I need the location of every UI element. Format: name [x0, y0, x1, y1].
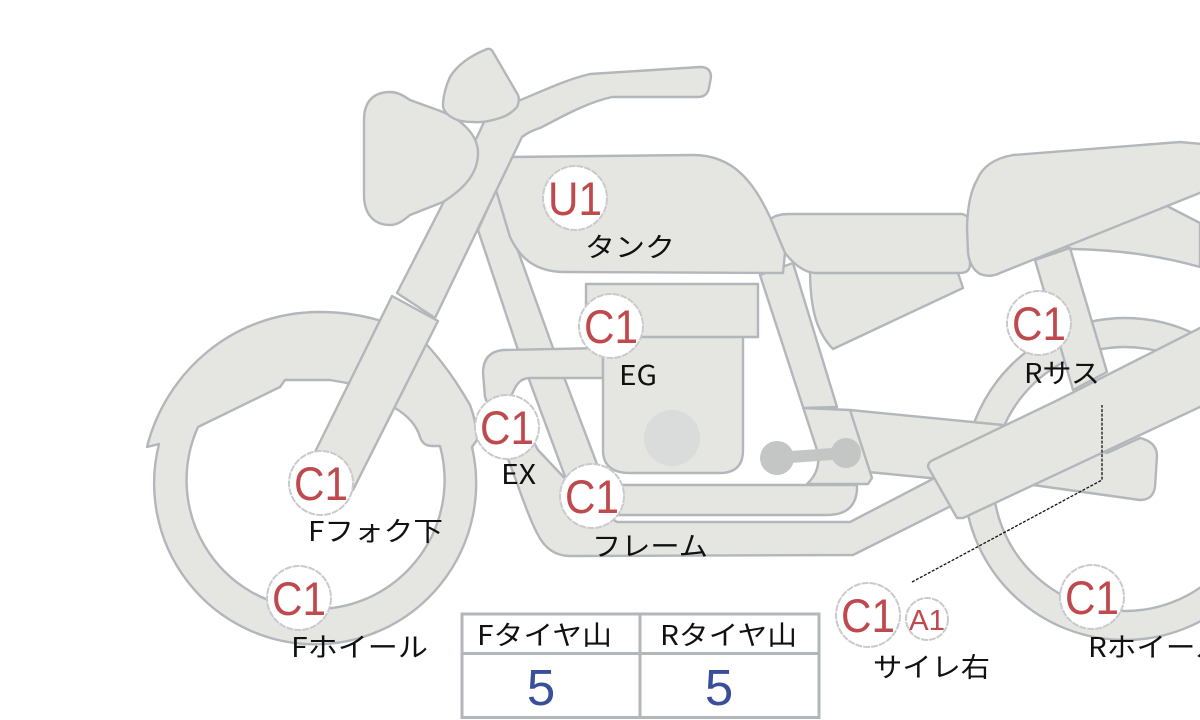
- tire tread table: 5: [527, 659, 555, 716]
- front fork lower: [315, 296, 438, 490]
- marker: front wheel: C1: [272, 572, 326, 625]
- marker: exhaust: [475, 395, 539, 492]
- marker: engine: C1: [584, 300, 638, 353]
- marker: rear suspension: Rサス: [1024, 352, 1100, 391]
- rear fender: [1040, 206, 1200, 267]
- engine crank cover: [644, 410, 700, 466]
- tire tread table: Rタイヤ山: [660, 614, 797, 653]
- marker: rear wheel: C1: [1065, 571, 1119, 624]
- rear frame tube: [760, 263, 872, 484]
- motorcycle illustration: [147, 49, 1200, 644]
- front down tube: [478, 190, 603, 490]
- front seat: [770, 214, 970, 273]
- marker: frame: C1: [565, 470, 619, 523]
- marker: frame: [560, 464, 708, 564]
- exhaust pipe: [483, 348, 975, 556]
- rear seat: [967, 142, 1200, 276]
- front wheel and fender: [147, 312, 477, 644]
- tire tread table: [462, 614, 819, 718]
- marker: muffler right: [836, 583, 990, 685]
- engine top: [586, 284, 758, 337]
- tire tread table: 5: [705, 659, 733, 716]
- rear suspension: [1035, 248, 1107, 390]
- lower frame tube: [600, 485, 857, 515]
- side cover: [810, 270, 963, 349]
- gray linkage: [760, 438, 861, 475]
- marker: engine: EG: [619, 354, 657, 393]
- marker: front wheel: Fホイール: [291, 626, 428, 665]
- tank: [496, 155, 785, 273]
- rear wheel: [964, 318, 1200, 640]
- headlight: [364, 92, 478, 225]
- swingarm: [850, 410, 1157, 500]
- marker: frame: フレーム: [592, 525, 708, 564]
- tire tread table: Fタイヤ山: [477, 614, 612, 653]
- marker: muffler right: サイレ右: [873, 646, 990, 685]
- muffler: [928, 327, 1200, 518]
- marker: tank: タンク: [585, 226, 675, 265]
- callout leader line: [912, 405, 1102, 582]
- marker: front fork lower: [289, 451, 443, 549]
- marker: exhaust: C1: [480, 401, 534, 454]
- marker: front fork lower: C1: [294, 457, 348, 510]
- speedometer: [443, 49, 519, 122]
- front fork and handlebar: [397, 67, 711, 318]
- marker: front fork lower: Fフォク下: [308, 510, 443, 549]
- marker: engine: [579, 294, 657, 393]
- marker: muffler right: C1: [841, 589, 895, 642]
- engine body: [603, 330, 743, 473]
- marker: exhaust: EX: [501, 453, 537, 492]
- marker: rear wheel: [1060, 565, 1200, 665]
- marker: muffler right: A1: [909, 605, 945, 637]
- marker: tank: U1: [548, 172, 602, 225]
- marker: tank: [543, 166, 675, 265]
- marker: rear suspension: [1007, 291, 1100, 391]
- marker: front wheel: [267, 566, 428, 665]
- marker: rear suspension: C1: [1012, 297, 1066, 350]
